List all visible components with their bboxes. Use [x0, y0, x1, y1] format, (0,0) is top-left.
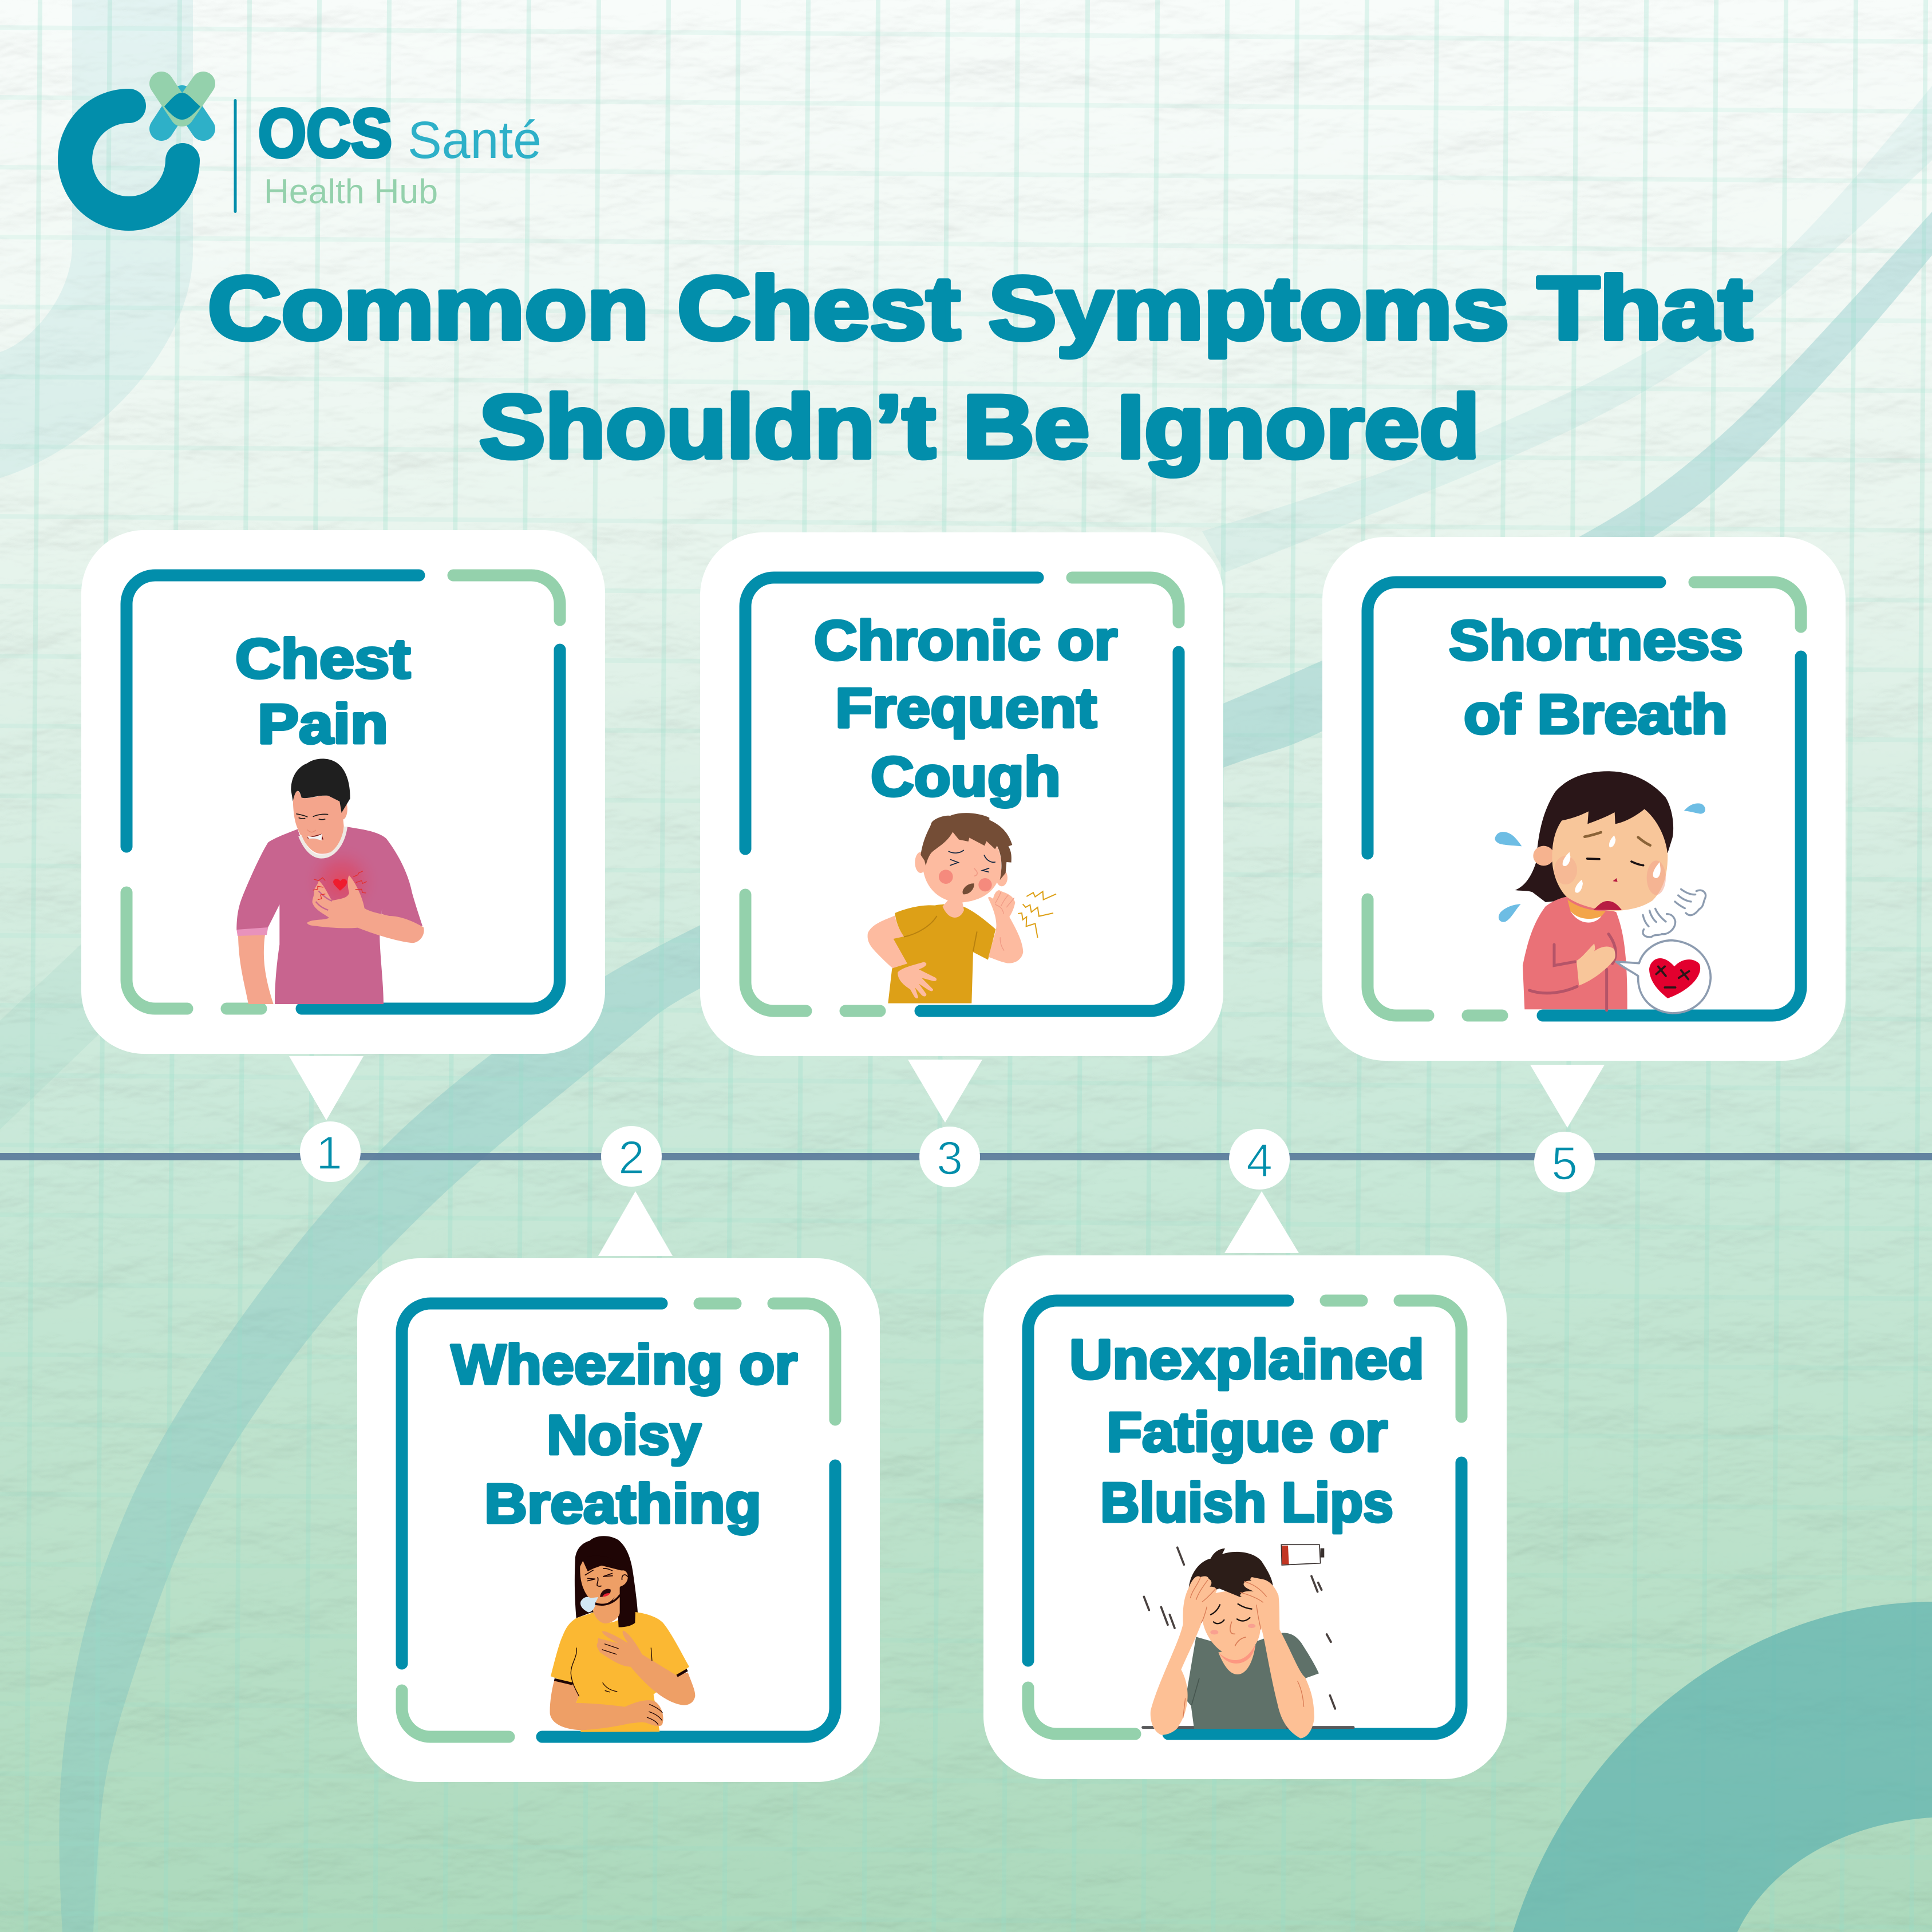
- marker 2: 2: [618, 1132, 645, 1184]
- marker 4: [1229, 1129, 1290, 1190]
- number markers: [300, 1121, 1595, 1192]
- card panel 3: [700, 532, 1223, 1056]
- illustration: girl short of breath: [1495, 771, 1710, 1013]
- marker 4: 4: [1246, 1135, 1273, 1187]
- heading: Chest Pain: [235, 627, 410, 755]
- marker 1: 1: [316, 1127, 342, 1179]
- heading: Chronic or Frequent Cough: Chronic or: [814, 609, 1117, 671]
- logo divider: [234, 99, 237, 213]
- card panel 1: [81, 530, 605, 1054]
- title: Common Chest Symptoms That: [208, 259, 1752, 358]
- heading: Chest Pain: Chest: [235, 627, 410, 690]
- marker 3: 3: [937, 1132, 963, 1184]
- logo wordmark Santé: Santé: [408, 111, 542, 169]
- marker 3: [919, 1127, 980, 1187]
- timeline: [0, 1153, 1932, 1160]
- heading: Unexplained Fatigue or Bluish Lips: Fatigue or: [1107, 1401, 1388, 1463]
- card 5: shortness of breath: [1322, 537, 1846, 1128]
- illustration: woman wheezing: [550, 1536, 695, 1732]
- card 4: fatigue: [983, 1191, 1507, 1779]
- pointer 4: [1224, 1191, 1299, 1253]
- card panel 5: [1322, 537, 1846, 1061]
- heading: Unexplained Fatigue or Bluish Lips: [1069, 1328, 1424, 1534]
- logo wordmark OCS: OCS: [258, 95, 392, 172]
- marker 5: [1534, 1132, 1595, 1192]
- card frame 4: [1028, 1301, 1461, 1734]
- heading: Chronic or Frequent Cough: [814, 609, 1117, 808]
- heading: Unexplained Fatigue or Bluish Lips: Unexplained: [1069, 1328, 1424, 1390]
- illustration: man holding chest: [236, 758, 424, 1004]
- heading: Unexplained Fatigue or Bluish Lips: Bluish Lips: [1100, 1471, 1393, 1534]
- logo: [75, 84, 542, 214]
- card 3: cough: [700, 532, 1223, 1123]
- card frame 2: [402, 1303, 835, 1737]
- card panel 2: [357, 1258, 880, 1782]
- card 1: chest pain: [81, 530, 605, 1120]
- heading: Wheezing or Noisy Breathing: Wheezing or: [451, 1333, 797, 1396]
- illustration: boy coughing: [868, 813, 1056, 1003]
- heading: Shortness of Breath: of Breath: [1464, 683, 1728, 745]
- heading: Chest Pain: Pain: [258, 693, 388, 755]
- pointer 3: [908, 1060, 982, 1123]
- card 2: wheezing: [357, 1191, 880, 1782]
- card frame 3: [745, 578, 1179, 1011]
- card panel 4: [983, 1255, 1507, 1779]
- illustration: tired man with low battery: [1143, 1544, 1353, 1739]
- heading: Wheezing or Noisy Breathing: Breathing: [484, 1472, 761, 1535]
- marker 2: [601, 1126, 662, 1187]
- pointer 5: [1530, 1065, 1605, 1128]
- heading: Wheezing or Noisy Breathing: Noisy: [547, 1404, 701, 1466]
- logo mark: [75, 84, 203, 214]
- marker 1: [300, 1121, 361, 1182]
- heading: Shortness of Breath: Shortness: [1449, 609, 1743, 671]
- logo tagline: Health Hub: [264, 172, 438, 211]
- card frame 1: [127, 575, 560, 1009]
- heading: Shortness of Breath: [1449, 609, 1743, 745]
- heading: Chronic or Frequent Cough: Cough: [871, 745, 1061, 808]
- pointer 2: [598, 1191, 673, 1256]
- title: [208, 259, 1752, 477]
- marker 5: 5: [1551, 1137, 1578, 1190]
- heading: Wheezing or Noisy Breathing: [451, 1333, 797, 1535]
- title: Shouldn’t Be Ignored: [479, 377, 1480, 477]
- card frame 5: [1368, 582, 1801, 1016]
- heading: Chronic or Frequent Cough: Frequent: [835, 677, 1097, 739]
- pointer 1: [289, 1056, 364, 1120]
